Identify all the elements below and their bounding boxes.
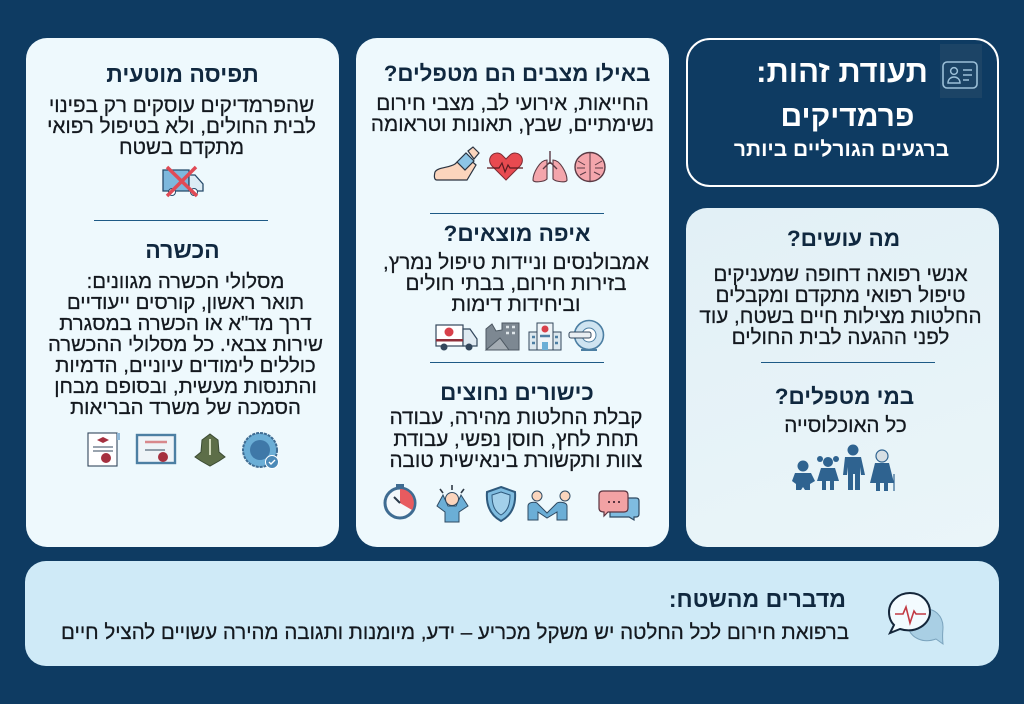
icon: ministry seal [243, 433, 278, 468]
panel: identity card title [686, 38, 999, 187]
text: misconception: לבית החולים, ולא בטיפול רפואי [47, 115, 316, 138]
text: what they do [699, 263, 982, 349]
icon: mri scanner [569, 320, 604, 351]
icon: ambulance [436, 325, 477, 350]
text: from the field: ברפואת חירום לכל החלטה יש משקל מכריע – ידע, מיומנות ותגובה מהירה עשויים להציל חיים [61, 621, 849, 644]
heading: from the field: מדברים מהשטח: [669, 586, 846, 612]
heading: where they work: איפה מוצאים? [444, 221, 590, 246]
text: where they work: אמבולנסים וניידות טיפול נמרץ, [383, 251, 649, 274]
text: training: דרך מד"א או הכשרה במסגרת [59, 313, 312, 335]
heading: which situations: באילו מצבים הם מטפלים? [384, 61, 650, 86]
text: training: שירות צבאי. כל מסלולי ההכשרה [48, 334, 323, 356]
title: identity card: תעודת זהות: [756, 54, 928, 89]
icons: medical conditions [434, 146, 606, 182]
text: which situations: החייאות, אירועי לב, מצבי חירום [376, 92, 649, 115]
title: identity card: ברגעים הגורליים ביותר [734, 138, 949, 161]
text: critical skills [389, 406, 643, 472]
icon: collapsed building [486, 323, 519, 350]
panel: from the field [25, 561, 999, 666]
text: misconception [47, 94, 316, 159]
icon: certificate [137, 435, 175, 463]
text: training [48, 271, 323, 419]
panel: misconception and training [26, 38, 339, 547]
text: which situations [371, 92, 654, 136]
heading: misconception: תפיסה מוטעית [106, 61, 259, 87]
icon: brain [575, 152, 605, 182]
text: what they do: טיפול רפואי מתקדם ומקבלים [715, 284, 966, 307]
icon: speech bubbles [599, 491, 639, 520]
title: identity card [734, 54, 949, 161]
icon: army emblem [195, 434, 225, 466]
icon: diploma [88, 433, 120, 466]
icon: stressed person [437, 485, 468, 522]
text: training: כוללים לימודים עיוניים, הדמיות [55, 355, 316, 377]
text: misconception: מתקדם בשטח [119, 136, 244, 159]
text: where they work: וביחידות דימות [452, 293, 580, 316]
text: misconception: שהפרמדיקים עוסקים רק בפינוי [49, 94, 314, 117]
text: training: הסמכה של משרד הבריאות [70, 397, 301, 419]
icons: certifications [87, 432, 279, 469]
icons: skills [384, 484, 640, 522]
icon: stopwatch [385, 484, 415, 518]
heading: training: הכשרה [145, 237, 220, 263]
heading: critical skills: כישורים נחוצים [440, 380, 594, 405]
heading: who they treat: במי מטפלים? [775, 384, 914, 409]
text: training: והתנסות מעשית, ובסופם מבחן [54, 376, 317, 398]
icon: heart with pulse [487, 153, 523, 180]
icon: shield [487, 487, 515, 521]
text: what they do: החלטות מצילות חיים בשטח, עוד [699, 305, 982, 328]
text: what they do: אנשי רפואה דחופה שמעניקים [713, 263, 968, 286]
icon: crossed out ambulance [162, 166, 204, 198]
text: where they work: בזירות חירום, בבתי חולים [406, 272, 626, 295]
icon: lungs [533, 151, 567, 182]
text: critical skills: תחת לחץ, חוסן נפשי, עבודת [393, 428, 639, 450]
text: critical skills: קבלת החלטות מהירה, עבודה [390, 406, 642, 429]
text: where they work [383, 251, 649, 316]
icons: workplaces [435, 320, 604, 351]
text: critical skills: צוות ותקשורת בינאישית טובה [389, 449, 643, 472]
title: identity card: פרמדיקים [781, 100, 914, 133]
panel: what they do [686, 208, 999, 547]
icon: id card [940, 44, 982, 98]
icon: handshake [528, 491, 570, 520]
text: training: תואר ראשון, קורסים ייעודיים [67, 292, 304, 314]
panel: where they treat [356, 38, 669, 547]
text: what they do: לפני ההגעה לבית החולים [732, 326, 949, 349]
icon: family of all ages [792, 444, 895, 491]
icon: hospital [529, 323, 561, 350]
icon: speech bubble with pulse [888, 592, 944, 645]
icon: bandaged foot [434, 147, 479, 180]
text: who they treat: כל האוכלוסייה [784, 414, 907, 437]
text: training: מסלולי הכשרה מגוונים: [87, 271, 284, 293]
text: which situations: נשימתיים, שבץ, תאונות וטראומה [371, 113, 654, 136]
heading: what they do: מה עושים? [787, 226, 900, 251]
